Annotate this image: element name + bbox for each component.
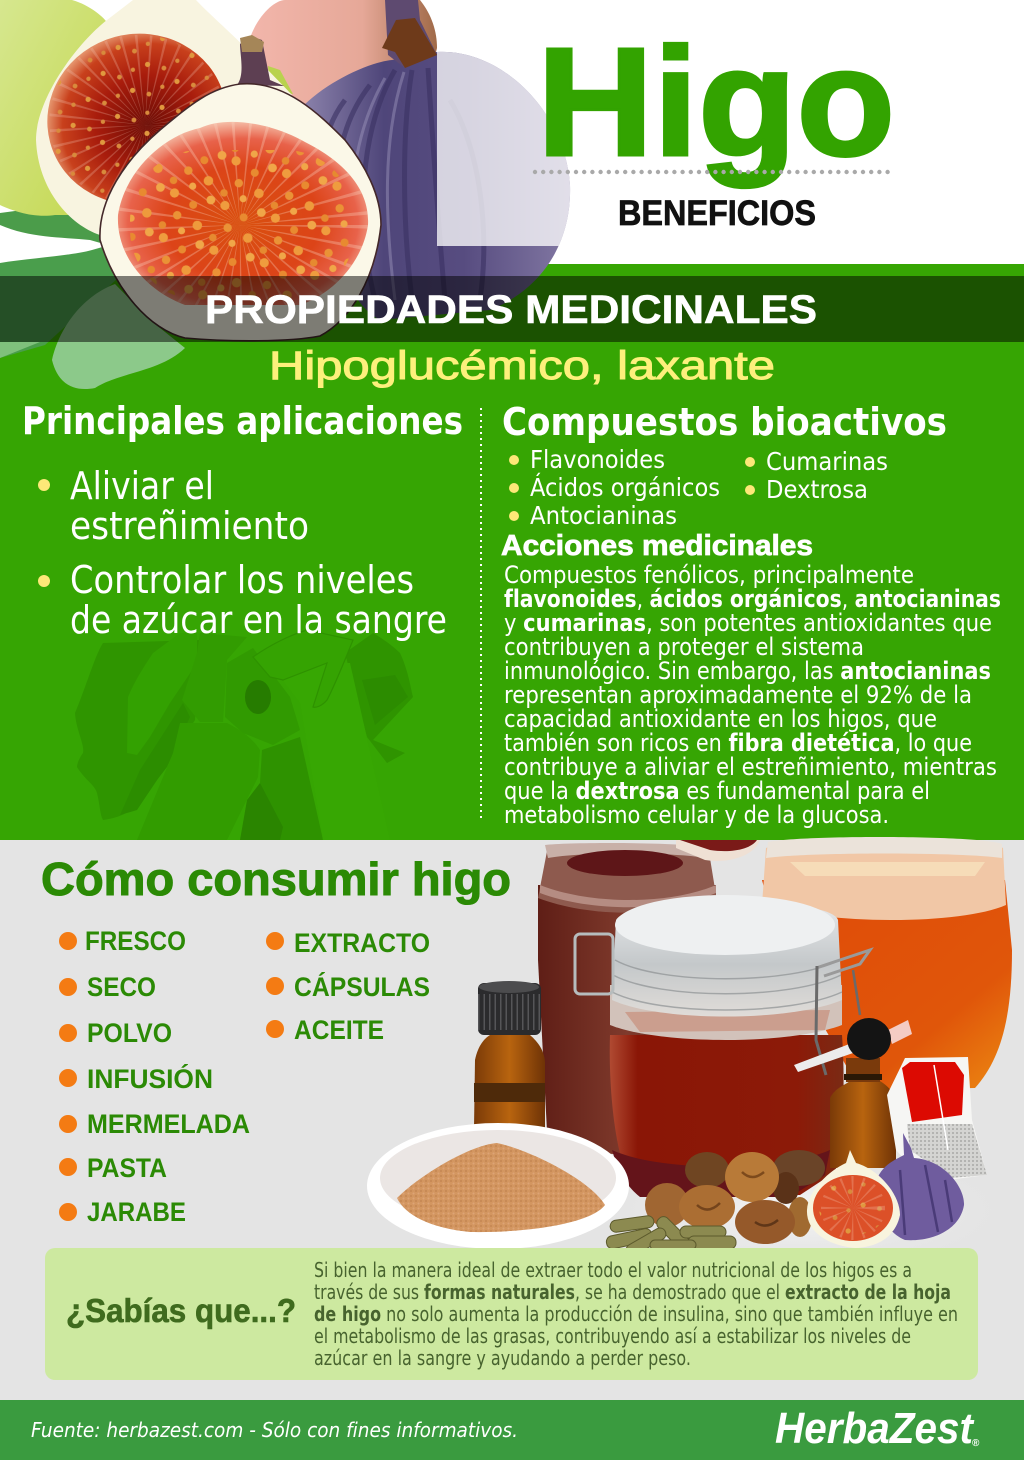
list: consumption forms, second column: CÁPSULAS — [294, 971, 430, 1002]
hand — [253, 630, 353, 707]
bullet item: controlar azúcar: Controlar los niveles — [70, 558, 414, 602]
compounds list: Cumarinas — [766, 447, 888, 476]
paragraph: medicinal actions: metabolismo celular y de la glucosa. — [504, 801, 889, 829]
pink fig — [250, 0, 437, 120]
capsules — [605, 1214, 736, 1258]
bullet item: aliviar el estreñimiento: Aliviar el — [70, 464, 214, 508]
list: consumption forms, first column: SECO — [87, 972, 156, 1002]
tea bag — [887, 1057, 987, 1180]
footer — [0, 1400, 1024, 1460]
large jar — [575, 895, 870, 1197]
paragraph: medicinal actions: capacidad antioxidante en los higos, que — [504, 705, 937, 733]
panel: how to consume background — [0, 840, 1024, 1400]
paragraph: medicinal actions: representan aproximadamente el 92% de la — [504, 681, 972, 709]
list: consumption forms, first column: JARABE — [87, 1197, 186, 1227]
purple fig — [304, 0, 577, 320]
subtitle: beneficios: BENEFICIOS — [618, 194, 816, 233]
list: consumption forms, second column: EXTRACTO — [294, 928, 430, 958]
list: consumption forms, first column: PASTA — [87, 1153, 167, 1183]
logo: HerbaZest: HerbaZest — [775, 1404, 975, 1453]
jam jar — [538, 843, 716, 1160]
spoon — [676, 840, 760, 861]
list: consumption forms, first column: MERMELADA — [87, 1109, 250, 1139]
paragraph: medicinal actions: flavonoides, ácidos orgánicos, antocianinas — [504, 585, 1001, 613]
paragraph: medicinal actions: Compuestos fenólicos, principalmente — [504, 561, 914, 589]
list: consumption forms, second column: ACEITE — [294, 1015, 384, 1045]
panel: compuestos bioactivos — [502, 400, 947, 530]
callout heading: ¿Sabías que...? — [66, 1292, 296, 1329]
panel: acciones medicinales — [501, 530, 1001, 829]
dark gap between legs — [240, 783, 283, 840]
compounds list: Antocianinas — [530, 501, 677, 530]
torso — [182, 633, 247, 722]
list: consumption forms, first column: INFUSIÓN — [87, 1063, 213, 1094]
list: consumption forms, first column — [59, 926, 250, 1227]
bowl of powder — [367, 1123, 629, 1249]
towel flap — [127, 633, 197, 755]
lime sliver behind halved fig — [268, 66, 293, 94]
right leg — [260, 737, 323, 840]
fig leaves — [0, 205, 185, 389]
paragraph: medicinal actions: contribuyen a proteger el sistema — [504, 633, 864, 661]
dropper bottle — [794, 1018, 912, 1168]
product photo collage — [367, 837, 1024, 1280]
list: consumption forms, second column — [266, 928, 430, 1045]
bullet item: aliviar el estreñimiento — [38, 464, 309, 548]
halved fig, main — [100, 35, 381, 341]
paragraph: medicinal actions: también son ricos en fibra dietética, lo que — [504, 729, 972, 757]
column divider — [480, 408, 482, 822]
heading: compuestos bioactivos: Compuestos bioactivos — [502, 400, 947, 444]
hero image: figs and leaves — [0, 0, 577, 389]
title word: Higo: Higo — [537, 16, 895, 188]
subheading: properties: Hipoglucémico, laxante — [269, 344, 775, 388]
panel: principales aplicaciones — [22, 399, 463, 642]
translucent title band — [0, 276, 1024, 342]
list: consumption forms, first column: POLVO — [87, 1018, 172, 1048]
dotted title rule — [535, 170, 890, 174]
bullet item: controlar azúcar — [38, 558, 447, 642]
callout text: azúcar en la sangre y ayudando a perder peso. — [314, 1346, 691, 1370]
green whole fig — [0, 0, 110, 216]
callout text — [314, 1258, 958, 1370]
callout text: través de sus formas naturales, se ha demostrado que el extracto de la hoja — [314, 1280, 951, 1304]
paragraph: medicinal actions: que la dextrosa es fundamental para el — [504, 777, 930, 805]
bullet item: controlar azúcar: de azúcar en la sangre — [70, 598, 447, 642]
list: consumption forms, first column: FRESCO — [85, 926, 186, 956]
floor glow — [570, 1140, 1024, 1280]
panel: green medicinal section background — [0, 264, 1024, 840]
paragraph: medicinal actions: inmunológico. Sin embargo, las antocianinas — [504, 657, 991, 685]
amber oil bottle — [474, 981, 545, 1128]
tea glass — [762, 837, 1012, 1090]
heading: propiedades medicinales: PROPIEDADES MEDICINALES — [205, 288, 817, 332]
compounds list: Ácidos orgánicos — [530, 473, 720, 502]
heading: acciones medicinales: Acciones medicinales — [501, 530, 813, 562]
left thigh — [137, 723, 260, 840]
title — [535, 16, 895, 233]
registered mark: ® — [972, 1438, 980, 1449]
compounds list: Dextrosa — [766, 475, 868, 504]
illustration: green-toned figure silhouette — [75, 630, 413, 840]
cut red fig — [28, 0, 292, 235]
compounds list: Flavonoides — [530, 445, 665, 474]
toilet roll — [225, 648, 300, 745]
right towel — [345, 633, 413, 763]
paragraph: medicinal actions — [504, 561, 1001, 829]
source note: Fuente: herbazest.com - Sólo con fines informativos. — [31, 1418, 518, 1442]
compounds list — [509, 445, 888, 530]
heading: principales aplicaciones: Principales aplicaciones — [22, 399, 463, 443]
paper strip — [280, 663, 390, 840]
small purple fig — [875, 1133, 964, 1240]
callout: did you know — [45, 1248, 978, 1380]
heading: cómo consumir higo: Cómo consumir higo — [41, 853, 511, 905]
left towel — [75, 640, 200, 820]
dried figs — [645, 1150, 825, 1244]
small cut fig — [807, 1150, 900, 1248]
bullet item: aliviar el estreñimiento: estreñimiento — [70, 504, 309, 548]
